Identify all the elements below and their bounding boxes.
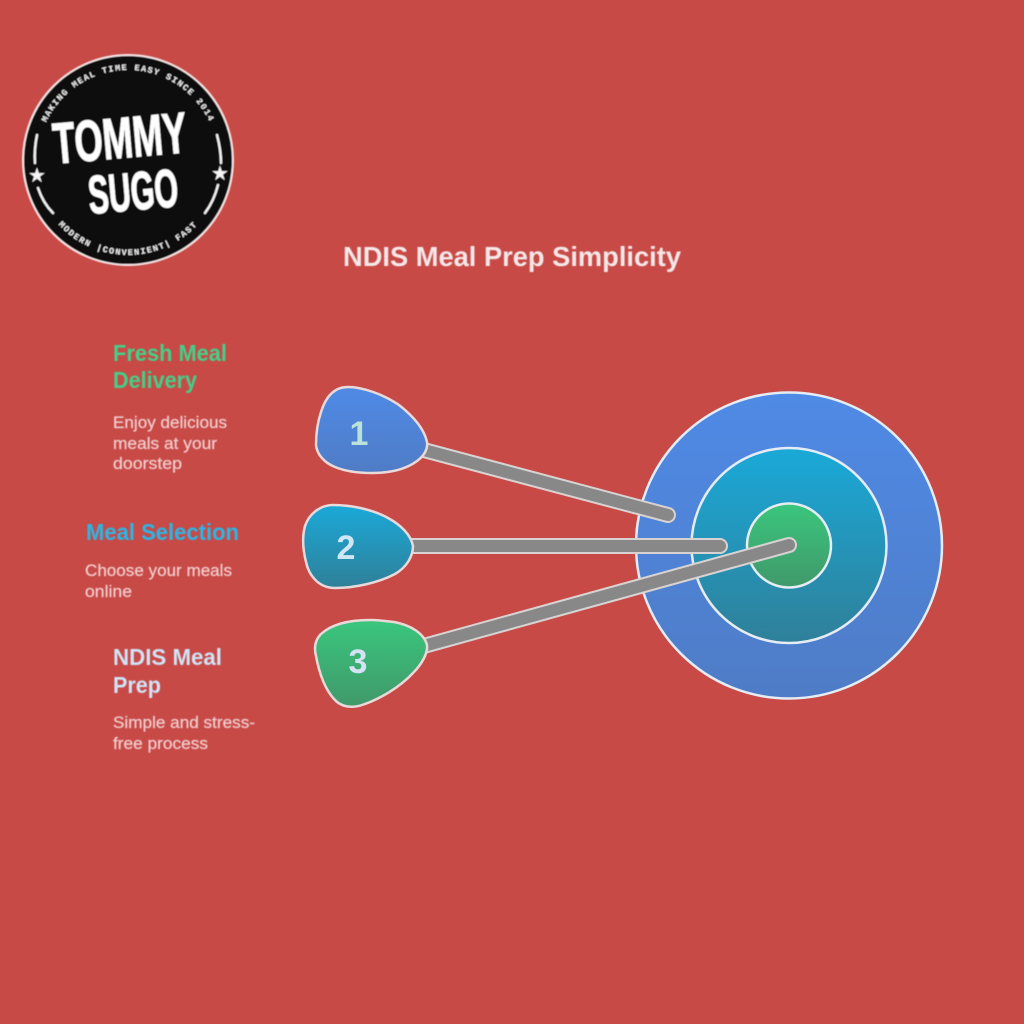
logo top tagline: MAKING MEAL TIME EASY SINCE 2014 xyxy=(40,63,215,123)
text block: Fresh Meal Delivery: meals at your xyxy=(113,434,217,453)
logo left ornament xyxy=(28,135,53,213)
logo right ornament xyxy=(205,135,229,213)
middle ring xyxy=(692,448,886,643)
marker 3 xyxy=(315,620,427,707)
arrow 2 shaft xyxy=(405,538,720,554)
marker 1 xyxy=(316,387,427,473)
text block: NDIS Meal Prep: Simple and stress- xyxy=(113,713,255,732)
marker 2 xyxy=(303,505,413,588)
text block: Fresh Meal Delivery: Enjoy delicious xyxy=(113,413,227,432)
logo bottom tagline: MODERN |CONVENIENT| FAST xyxy=(58,220,196,256)
text block: NDIS Meal Prep: NDIS Meal xyxy=(113,644,222,670)
logo wordmark: SUGO xyxy=(86,158,181,226)
marker 1: 1 xyxy=(350,415,368,453)
target: concentric circles xyxy=(636,392,942,698)
text block: NDIS Meal Prep: free process xyxy=(113,734,208,753)
text block: NDIS Meal Prep xyxy=(113,644,255,753)
text block: Fresh Meal Delivery xyxy=(113,340,227,473)
logo wordmark: TOMMY xyxy=(50,100,189,177)
inner bullseye xyxy=(747,504,831,588)
marker 3: 3 xyxy=(349,643,367,681)
text block: Meal Selection: online xyxy=(85,582,132,601)
logo right ornament: ★ xyxy=(211,161,229,185)
text block: Fresh Meal Delivery: doorstep xyxy=(113,454,182,473)
text block: Fresh Meal Delivery: Fresh Meal xyxy=(113,340,227,366)
arrow 1 shaft xyxy=(420,449,668,515)
marker 2: 2 xyxy=(337,529,355,567)
logo wordmark xyxy=(50,100,189,226)
logo left ornament: ★ xyxy=(28,163,46,187)
text block: Fresh Meal Delivery: Delivery xyxy=(113,367,197,393)
title: NDIS Meal Prep Simplicity xyxy=(343,241,681,272)
text block: Meal Selection: Choose your meals xyxy=(85,561,232,580)
text block: Meal Selection: Meal Selection xyxy=(86,519,239,545)
arrow 3 shaft xyxy=(420,545,789,647)
text block: NDIS Meal Prep: Prep xyxy=(113,672,161,698)
outer ring xyxy=(636,392,942,698)
text block: Meal Selection xyxy=(85,519,239,601)
logo: Tommy Sugo badge xyxy=(21,53,235,267)
